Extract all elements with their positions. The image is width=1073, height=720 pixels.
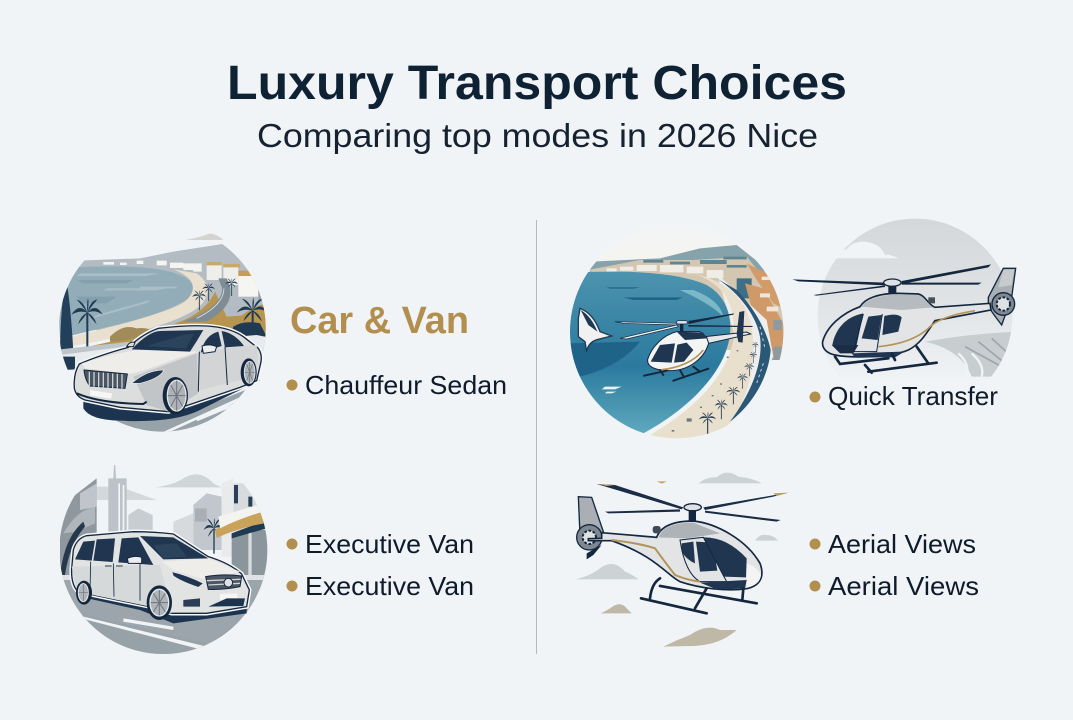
title: Luxury Transport Choices [227, 57, 847, 110]
van wheels [76, 581, 172, 620]
illustration: helicopter with clouds [576, 473, 788, 647]
clouds [576, 473, 778, 647]
skids [835, 347, 937, 373]
subtitle: Comparing top modes in 2026 Nice [257, 117, 818, 154]
tail-rotor fragment [578, 308, 612, 352]
illustration: helicopter in profile with grey disc [792, 218, 1016, 377]
bullet: quick transfer: Quick Transfer [828, 381, 998, 411]
illustration: helicopter over Baie des Anges [570, 245, 784, 438]
divider between car and helicopter columns [536, 220, 538, 654]
helicopter skids [644, 367, 708, 381]
bullet: executive van (first): Executive Van [305, 529, 474, 559]
car shadow [83, 377, 260, 421]
van body [72, 532, 249, 613]
helicopter fuselage [648, 332, 709, 371]
helicopter tail [705, 311, 751, 343]
fuselage [588, 521, 762, 590]
illustration: executive van in city [60, 465, 268, 654]
tail [577, 497, 603, 559]
helicopter rotor blades [615, 313, 753, 339]
van headlight and grille [172, 572, 245, 607]
bullet: aerial views (first): Aerial Views [828, 529, 976, 559]
sedan grille [84, 370, 127, 388]
category heading: Car & Van [290, 300, 469, 342]
van shadow [80, 597, 247, 623]
fuselage [823, 293, 991, 357]
rotor [597, 484, 788, 522]
rotor [792, 264, 991, 296]
sedan body [74, 326, 261, 412]
bullet: chauffeur sedan: Chauffeur Sedan [305, 370, 507, 400]
bullet: executive van (second): Executive Van [305, 571, 474, 601]
tail [988, 268, 1016, 325]
illustration: chauffeur sedan on Nice promenade [57, 233, 273, 440]
skids [641, 578, 757, 613]
bullet: aerial views (second): Aerial Views [828, 571, 979, 601]
sedan wheels [163, 358, 257, 414]
